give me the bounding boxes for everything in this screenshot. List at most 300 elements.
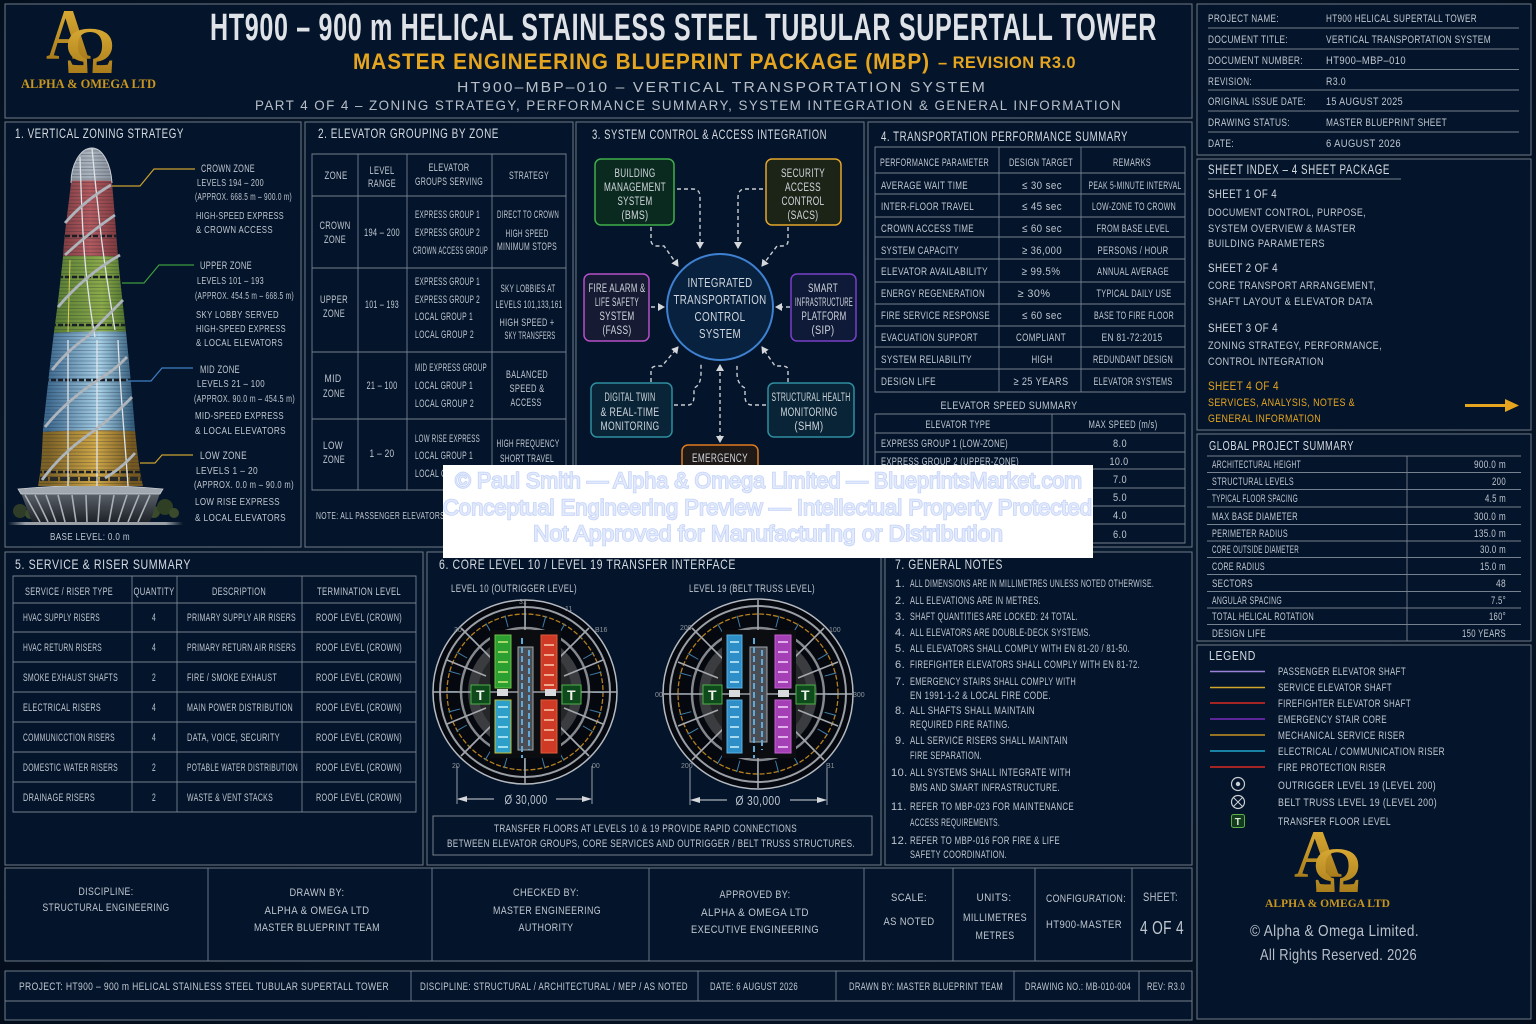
box: FASS: FIRE ALARM & [588,283,646,295]
transfer note box [433,816,872,855]
upper row: EXPRESS GROUP 1 [415,276,480,288]
table: performance: ≥ 99.5% [1022,266,1060,278]
panel: general notes [885,552,1192,865]
crown row: ZONE [324,234,346,246]
heading: 7. GENERAL NOTES [895,556,1003,572]
upper row: 101 – 193 [365,299,399,311]
notes list: REFER TO MBP-016 FOR FIRE & LIFE [910,835,1060,847]
table: risers [13,576,416,812]
notes list: FIRE SEPARATION. [910,750,982,762]
notes list [891,578,1154,861]
box: BMS: MANAGEMENT [604,182,666,194]
title block [5,868,1192,961]
sheet 3 entry [1208,321,1382,368]
legend lines [1210,672,1265,767]
scale: AS NOTED [884,916,934,928]
notes list: SAFETY COORDINATION. [910,849,1007,861]
checked by: AUTHORITY [518,922,574,934]
watermark: © Paul Smith — Alpha & Omega Limited — BlueprintsMarket.com [455,468,1082,493]
table: elevator groups: GROUPS SERVING [415,176,483,188]
plan tick labels: 11 [565,606,572,613]
leader lines [112,169,195,463]
crown row: HIGH SPEED [506,228,548,240]
summary table [1207,456,1521,641]
notes list: SHAFT QUANTITIES ARE LOCKED: 24 TOTAL. [910,611,1078,623]
subtitle: MASTER ENGINEERING BLUEPRINT PACKAGE (MBP) [353,49,930,74]
document control rows: 15 AUGUST 2025 [1326,96,1403,108]
table: elevator speed: 6.0 [1113,529,1127,541]
heading: SHEET INDEX – 4 SHEET PACKAGE [1208,161,1390,177]
sheet 3 entry: CONTROL INTEGRATION [1208,356,1324,368]
plan: level 10 [433,599,617,807]
table: performance: PERFORMANCE PARAMETER [880,157,989,169]
upper zone label: SKY LOBBY SERVED [196,310,279,321]
transfer markers [471,685,581,704]
table: performance: TYPICAL DAILY USE [1096,288,1172,300]
configuration: HT900-MASTER [1046,919,1122,931]
table: risers: SERVICE / RISER TYPE [25,586,113,598]
heading: 5. SERVICE & RISER SUMMARY [15,556,191,572]
summary table: 900.0 m [1474,459,1506,471]
box: digital twin: MONITORING [600,421,660,433]
upper row: SKY TRANSFERS [504,330,556,342]
upper row: LOCAL GROUP 1 [415,311,473,323]
plan tick labels: 100 [829,627,841,634]
crown row [320,209,559,257]
table: risers: ROOF LEVEL (CROWN) [316,612,402,624]
approved by: APPROVED BY: [720,889,790,901]
table: risers: COMMUNICCTION RISERS [23,732,115,744]
box: SACS: (SACS) [788,210,818,222]
summary table: PERIMETER RADIUS [1212,528,1288,540]
panel: legend [1197,645,1531,1019]
box: emergency [682,445,758,495]
table: risers: QUANTITY [134,586,175,598]
icon: belt truss [1232,796,1244,808]
table: risers: 4 [152,612,156,624]
crown zone label [195,163,292,236]
summary table: 200 [1492,476,1506,488]
table: elevator groups: ELEVATOR [428,162,470,174]
sheet: 4 OF 4 [1140,918,1184,938]
table: performance: ≥ 25 YEARS [1014,376,1068,388]
upper zone label: UPPER ZONE [200,260,252,272]
table: risers: TERMINATION LEVEL [317,586,401,598]
table: risers: MAIN POWER DISTRIBUTION [187,702,293,714]
low row: LOCAL GROUP 1 [415,450,473,462]
copyright: © Alpha & Omega Limited. [1250,923,1419,940]
logo: Alpha and Omega [21,0,156,91]
table: risers: ELECTRICAL RISERS [23,702,101,714]
logo: Alpha and Omega: ALPHA & OMEGA LTD [21,77,156,91]
legend labels: MECHANICAL SERVICE RISER [1278,730,1405,742]
crown zone label: HIGH-SPEED EXPRESS [196,211,284,222]
table: performance: COMPLIANT [1016,332,1066,344]
box: structural health monitoring: STRUCTURAL HEALTH [772,392,850,404]
document control rows: HT900 HELICAL SUPERTALL TOWER [1326,13,1477,25]
logo: Alpha and Omega [1265,816,1390,910]
table: risers: DOMESTIC WATER RISERS [23,762,118,774]
discipline: DISCIPLINE: [78,886,134,898]
bottom project strip [5,971,1192,1020]
dimension: Ø 30,000 [736,793,780,808]
box: SACS: ACCESS [785,182,821,194]
summary table: TOTAL HELICAL ROTATION [1212,611,1314,623]
crown zone label: (APPROX. 668.5 m – 900.0 m) [195,192,292,203]
plan tick labels: 00 [592,763,600,770]
table: performance: ≤ 60 sec [1022,223,1062,235]
discipline: STRUCTURAL ENGINEERING [42,902,170,914]
table: risers: ROOF LEVEL (CROWN) [316,792,402,804]
drawn by: MASTER BLUEPRINT TEAM [254,922,380,934]
low zone label: (APPROX. 0.0 m – 90.0 m) [194,480,294,491]
notes list: 1. [895,578,905,590]
heading: LEGEND [1209,648,1256,663]
legend labels [1278,666,1445,828]
legend labels: FIREFIGHTER ELEVATOR SHAFT [1278,698,1411,710]
plan: level 19 [655,599,865,808]
summary table: 135.0 m [1474,528,1506,540]
table: elevator speed [875,414,1185,543]
discipline [42,886,170,914]
table: performance: DESIGN TARGET [1009,157,1073,169]
scale [884,892,934,928]
plan tick labels: 00 [655,692,663,699]
crown row: CROWN ACCESS GROUP [413,245,488,257]
legend labels: FIRE PROTECTION RISER [1278,762,1386,774]
mid zone label: MID-SPEED EXPRESS [195,411,284,422]
panel: vertical zoning strategy [5,122,301,547]
summary table: 48 [1496,578,1506,590]
panel: core level transfer interface [427,552,881,865]
summary table: CORE RADIUS [1212,561,1265,573]
document control rows: 6 AUGUST 2026 [1326,138,1401,150]
notes list: ALL SERVICE RISERS SHALL MAINTAIN [910,735,1068,747]
notes list: 12. [891,835,908,847]
table: performance: ≤ 60 sec [1022,310,1062,322]
summary table: 7.5° [1491,595,1506,607]
mid zone label: MID ZONE [200,364,240,376]
table: risers: ROOF LEVEL (CROWN) [316,702,402,714]
box: BMS: SYSTEM [618,196,652,208]
upper zone label: LEVELS 101 – 193 [197,276,264,287]
table: performance: FROM BASE LEVEL [1096,223,1170,235]
panel: elevator grouping by zone [305,122,573,547]
notes list: ALL DIMENSIONS ARE IN MILLIMETRES UNLESS NOTED OTHERWISE. [910,578,1154,590]
notes list: ALL ELEVATORS ARE DOUBLE-DECK SYSTEMS. [910,627,1091,639]
subtitle: – REVISION R3.0 [938,53,1076,72]
low zone label [194,450,294,524]
plan tick labels: 30 [454,627,462,634]
upper zone label: & LOCAL ELEVATORS [196,338,283,349]
sheet 1 entry: SYSTEM OVERVIEW & MASTER [1208,223,1356,235]
low row: LOW RISE EXPRESS [415,433,480,445]
table: risers: POTABLE WATER DISTRIBUTION [187,762,298,774]
table: performance [875,147,1185,392]
table: elevator groups: RANGE [368,178,396,190]
mid row: BALANCED [506,369,548,381]
box: FASS: (FASS) [602,325,632,337]
logo: Alpha and Omega: Ω [65,14,115,88]
table: elevator groups: STRATEGY [509,170,549,182]
base level label: BASE LEVEL: 0.0 m [50,532,130,543]
approved by: EXECUTIVE ENGINEERING [691,924,819,936]
legend labels: OUTRIGGER LEVEL 19 (LEVEL 200) [1278,780,1436,792]
heading: 4. TRANSPORTATION PERFORMANCE SUMMARY [881,128,1128,144]
summary table: STRUCTURAL LEVELS [1212,476,1294,488]
table: elevator groups [312,154,566,490]
central control circle [667,254,773,360]
low zone label: & LOCAL ELEVATORS [195,513,286,524]
central control circle: CONTROL [694,309,746,324]
notes list: 5. [895,643,905,655]
table: performance: ENERGY REGENERATION [881,288,985,300]
document control rows: R3.0 [1326,76,1346,88]
crown row: 194 – 200 [364,227,400,239]
document control rows: HT900–MBP–010 [1326,55,1406,67]
legend labels: EMERGENCY STAIR CORE [1278,714,1387,726]
box: SIP: PLATFORM [802,311,846,323]
logo: Alpha and Omega: ALPHA & OMEGA LTD [1265,896,1390,910]
heading: 3. SYSTEM CONTROL & ACCESS INTEGRATION [592,126,827,142]
logo: Alpha and Omega: A [1294,816,1342,892]
header panel [5,0,1192,118]
legend labels: PASSENGER ELEVATOR SHAFT [1278,666,1406,678]
table: elevator speed: 10.0 [1110,456,1128,468]
document control rows: DOCUMENT NUMBER: [1208,55,1303,67]
table: risers: 4 [152,642,156,654]
units: MILLIMETRES [963,912,1027,924]
tower illustration [8,146,183,525]
upper zone label [195,260,294,349]
mid row: 21 – 100 [366,380,398,392]
low row: LOW [323,440,343,452]
icon: transfer floor [1232,814,1244,828]
low zone label: LOW RISE EXPRESS [195,497,280,508]
document control rows: DOCUMENT TITLE: [1208,34,1288,46]
table: risers: DESCRIPTION [212,586,266,598]
table: risers: 2 [152,672,156,684]
table: performance: REDUNDANT DESIGN [1093,354,1173,366]
notes list: REQUIRED FIRE RATING. [910,719,1010,731]
sheet 1 entry: DOCUMENT CONTROL, PURPOSE, [1208,207,1366,219]
arrow: current sheet [1465,399,1519,412]
document control rows: MASTER BLUEPRINT SHEET [1326,117,1447,129]
approved by [691,889,819,936]
box: SIP [791,274,856,341]
table: performance: CROWN ACCESS TIME [881,223,974,235]
table: elevator speed: EXPRESS GROUP 1 (LOW-ZONE) [881,438,1008,450]
table: performance: REMARKS [1113,157,1151,169]
plan tick labels: B1 [826,763,835,770]
table: risers: 2 [152,762,156,774]
heading: GLOBAL PROJECT SUMMARY [1209,438,1354,453]
table: elevator speed: ELEVATOR TYPE [926,419,990,431]
panel: service and riser summary [5,552,423,865]
icon: outrigger [1232,778,1244,790]
plan tick labels: 300 [853,692,865,699]
level 19 heading: LEVEL 19 (BELT TRUSS LEVEL) [689,583,815,595]
sheet 4 entry [1208,379,1355,425]
sheet 1 entry: SHEET 1 OF 4 [1208,187,1277,201]
box: structural health monitoring: MONITORING [780,407,838,419]
table: risers: ROOF LEVEL (CROWN) [316,732,402,744]
upper row: ZONE [323,308,345,320]
part line: PART 4 OF 4 – ZONING STRATEGY, PERFORMANCE SUMMARY, SYSTEM INTEGRATION & GENERAL INFORMATION [255,97,1122,113]
low row: LOCAL GROUP 2 [415,468,474,480]
sheet 2 entry: CORE TRANSPORT ARRANGEMENT, [1208,280,1376,292]
sheet 2 entry: SHAFT LAYOUT & ELEVATOR DATA [1208,296,1373,308]
table: performance: ≤ 30 sec [1022,180,1062,192]
table: risers: ROOF LEVEL (CROWN) [316,762,402,774]
document line: HT900–MBP–010 – VERTICAL TRANSPORTATION SYSTEM [457,79,987,96]
table: risers: HVAC RETURN RISERS [23,642,102,654]
notes list: ALL ELEVATORS SHALL COMPLY WITH EN 81-20 / 81-50. [910,643,1130,655]
central control circle: SYSTEM [699,326,741,341]
mid row: MID [324,373,342,385]
upper zone label: HIGH-SPEED EXPRESS [196,324,286,335]
mid zone label [194,364,295,437]
notes list: 6. [895,659,905,671]
low row: ZONE [323,454,345,466]
table: elevator speed: 5.0 [1113,492,1127,504]
document control rows [1208,13,1491,150]
plan tick labels [452,599,608,770]
mid row: ACCESS [510,397,542,409]
table: elevator speed: 4.0 [1113,510,1127,522]
notes list: EN 1991-1-2 & LOCAL FIRE CODE. [910,690,1051,702]
strip text: DRAWING NO.: MB-010-004 [1025,981,1131,993]
plan tick labels: B16 [595,627,608,634]
table: performance: FIRE SERVICE RESPONSE [881,310,990,322]
crown zone label: & CROWN ACCESS [196,225,273,236]
mid zone label: LEVELS 21 – 100 [197,379,265,390]
mid zone label: (APPROX. 90.0 m – 454.5 m) [194,394,295,405]
table: performance: HIGH [1032,354,1052,366]
table: risers: ROOF LEVEL (CROWN) [316,642,402,654]
plan tick labels: 20 [452,763,460,770]
table: elevator speed: 8.0 [1113,438,1127,450]
document control rows: DATE: [1208,138,1234,150]
panel: document control [1197,4,1531,155]
notes list: ALL ELEVATIONS ARE IN METRES. [910,595,1041,607]
table: performance: AVERAGE WAIT TIME [881,180,968,192]
table: performance: EVACUATION SUPPORT [881,332,978,344]
sheet 2 entry [1208,261,1376,308]
crown row: CROWN [320,220,350,232]
table: elevator speed: MAX SPEED (m/s) [1088,419,1158,431]
crown row: DIRECT TO CROWN [497,209,559,221]
notes list: 2. [895,595,905,607]
table: performance: EN 81-72:2015 [1102,332,1162,344]
checked by: MASTER ENGINEERING [493,905,601,917]
notes list: FIREFIGHTER ELEVATORS SHALL COMPLY WITH EN 81-72. [910,659,1140,671]
watermark: Not Approved for Manufacturing or Distribution [533,521,1003,546]
legend labels: SERVICE ELEVATOR SHAFT [1278,682,1392,694]
sheet 4 entry: GENERAL INFORMATION [1208,413,1321,425]
box: SIP: INFRASTRUCTURE [795,297,853,309]
panel: global project summary [1197,434,1531,641]
mid row: LOCAL GROUP 2 [415,398,474,410]
box: SACS: SECURITY [781,168,825,180]
document control rows: ORIGINAL ISSUE DATE: [1208,96,1306,108]
low row: 1 – 20 [370,448,394,460]
table: risers: HVAC SUPPLY RISERS [23,612,100,624]
notes list: ALL SHAFTS SHALL MAINTAIN [910,705,1035,717]
sheet 4 entry: SERVICES, ANALYSIS, NOTES & [1208,397,1355,409]
watermark: Conceptual Engineering Preview — Intellectual Property Protected [443,495,1092,520]
summary table: 30.0 m [1480,544,1506,556]
notes list: EMERGENCY STAIRS SHALL COMPLY WITH [910,676,1076,688]
table: risers: DRAINAGE RISERS [23,792,95,804]
notes list: 9. [895,735,905,747]
table: risers: ROOF LEVEL (CROWN) [316,672,402,684]
box: SACS [766,159,841,225]
transfer markers: T [476,687,485,703]
box: BMS [595,159,674,225]
level 10 heading: LEVEL 10 (OUTRIGGER LEVEL) [451,583,577,595]
table: performance: SYSTEM RELIABILITY [881,354,972,366]
dimension: Ø 30,000 [504,792,548,807]
upper row: HIGH SPEED + [500,317,554,329]
table: performance: LOW-ZONE TO CROWN [1092,201,1176,213]
table note: NOTE: ALL PASSENGER ELEVATORS ARE DOUBLE-DECK SYSTEMS. [316,511,556,522]
table: performance: SYSTEM CAPACITY [881,245,959,257]
notes list: BMS AND SMART INFRASTRUCTURE. [910,782,1060,794]
box: FASS: LIFE SAFETY [595,297,639,309]
document control rows: DRAWING STATUS: [1208,117,1290,129]
connector arrows [651,189,790,442]
table: risers: FIRE / SMOKE EXHAUST [187,672,277,684]
icon: transfer floor: T [1235,817,1241,828]
transfer markers: T [801,687,810,703]
mid row [323,362,548,410]
table: risers: 2 [152,792,156,804]
summary table: 15.0 m [1480,561,1506,573]
crown row: MINIMUM STOPS [497,241,557,253]
table: elevator speed: EXPRESS GROUP 2 (UPPER-ZONE) [881,456,1019,468]
notes list: 11. [891,801,907,813]
heading: 2. ELEVATOR GROUPING BY ZONE [318,125,499,141]
copyright [1250,923,1419,964]
approved by: ALPHA & OMEGA LTD [701,907,809,919]
table: risers: 4 [152,732,156,744]
table: risers: PRIMARY RETURN AIR RISERS [187,642,296,654]
drawn by: DRAWN BY: [290,887,344,899]
box: emergency: EMERGENCY [692,453,748,465]
low zone label: LEVELS 1 – 20 [196,466,258,477]
box: BMS: (BMS) [622,210,648,222]
dimension [690,768,827,808]
summary table: TYPICAL FLOOR SPACING [1212,493,1298,505]
drawn by: ALPHA & OMEGA LTD [264,905,370,917]
legend labels: BELT TRUSS LEVEL 19 (LEVEL 200) [1278,797,1437,809]
plan tick labels: 200 [680,625,692,632]
box: digital twin [591,383,672,437]
units [963,892,1027,942]
summary table: MAX BASE DIAMETER [1212,511,1298,523]
summary table: 160° [1489,611,1506,623]
checked by [493,887,601,934]
low row: SHORT TRAVEL [500,453,554,465]
speed summary heading: ELEVATOR SPEED SUMMARY [940,400,1078,412]
plan tick labels: 31 [519,599,527,606]
sheet 2 entry: SHEET 2 OF 4 [1208,261,1278,275]
central control circle: INTEGRATED [688,275,752,290]
sheet 3 entry: ZONING STRATEGY, PERFORMANCE, [1208,340,1382,352]
panel: sheet index [1197,159,1531,430]
upper row: SKY LOBBIES AT [500,283,556,295]
